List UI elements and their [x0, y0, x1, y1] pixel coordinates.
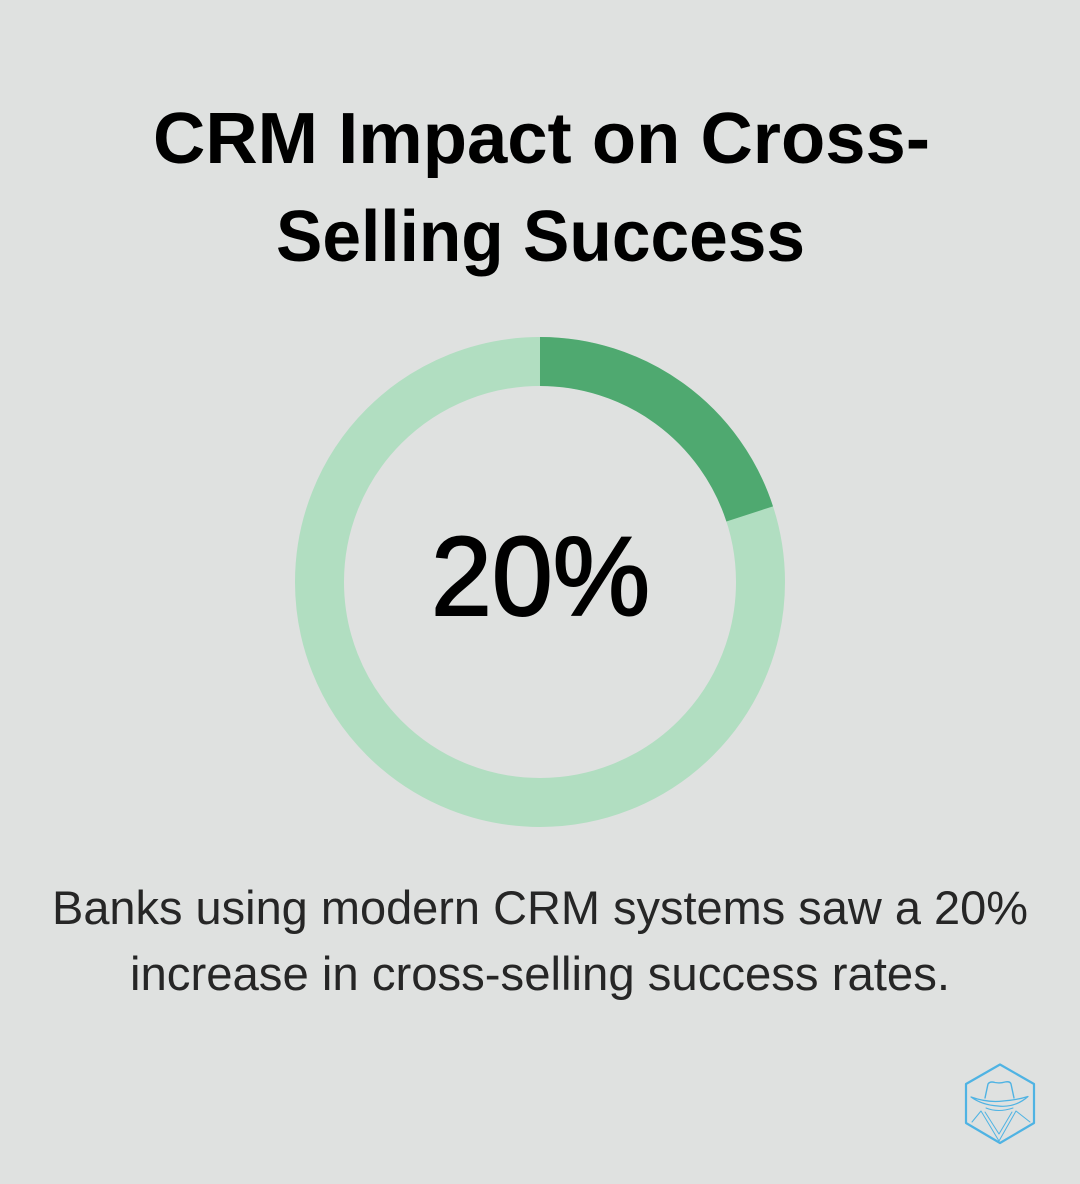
description text: Banks using modern CRM systems saw a 20% — [52, 881, 1028, 934]
description text: increase in cross-selling success rates. — [130, 947, 950, 1000]
center value: 20% — [431, 514, 650, 639]
title — [153, 99, 930, 277]
description text — [52, 881, 1028, 1000]
title: Selling Success — [276, 197, 805, 277]
donut chart: 20% — [320, 362, 760, 802]
icon: hexagon logo with hat-wearing spy — [966, 1064, 1034, 1143]
title: CRM Impact on Cross- — [153, 99, 930, 179]
